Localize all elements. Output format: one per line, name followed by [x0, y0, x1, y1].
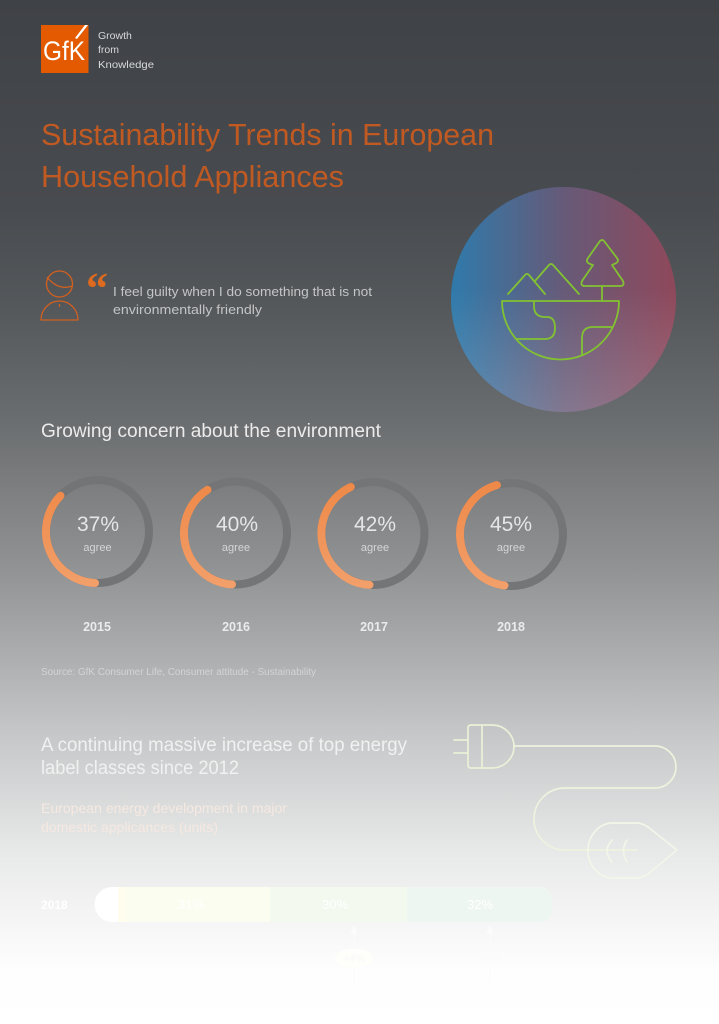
icon: plug with leaf — [454, 725, 677, 878]
donut chart: 2017: agree — [361, 542, 389, 554]
heading: energy label classes: label classes since 2012 — [41, 758, 239, 779]
row label: 2018 — [41, 898, 68, 912]
quote text: environmentally friendly — [113, 302, 263, 317]
donut chart: 2015: 2015 — [83, 620, 111, 634]
heading: growing concern: Growing concern about the environment — [41, 421, 382, 442]
donut chart: 2016: 2016 — [222, 620, 250, 634]
donut chart: 2015: 37% — [77, 513, 119, 536]
GfK logo: from — [98, 44, 119, 56]
heading: energy label classes — [41, 735, 407, 779]
icon: landscape in gradient circle — [451, 187, 676, 412]
title — [41, 117, 494, 194]
donut chart: 2017: 2017 — [360, 620, 388, 634]
bar values — [178, 897, 493, 912]
donut chart: 2018: 45% — [490, 513, 532, 536]
donut chart: 2017 — [321, 482, 424, 634]
arrow and change badge: first class: +4% — [343, 953, 365, 965]
donut chart: 2017: 42% — [354, 513, 396, 536]
donut chart: 2018: agree — [497, 542, 525, 554]
bar segments — [94, 887, 552, 922]
donut chart: 2016: agree — [222, 542, 250, 554]
GfK logo — [41, 25, 154, 73]
donut chart: 2015 — [46, 480, 149, 634]
donut chart: 2018 — [460, 483, 563, 634]
arrow and change badge: first class — [335, 925, 373, 984]
subheading: energy development: domestic applicances (units) — [41, 820, 218, 835]
donut chart: 2016: 40% — [216, 513, 258, 536]
bar values: 30% — [322, 897, 348, 912]
donut chart: 2015: agree — [83, 542, 112, 554]
arrow and change badge: second class: +2% — [479, 953, 501, 965]
GfK logo: Growth — [98, 30, 132, 42]
title: Sustainability Trends in European — [41, 117, 494, 152]
arrow and change badge: second class — [479, 925, 501, 984]
icon: person — [41, 271, 78, 320]
quote text: I feel guilty when I do something that is not — [113, 284, 372, 299]
GfK logo: GfK — [43, 36, 85, 66]
bar values: 31% — [178, 897, 204, 912]
source note: Source: GfK Consumer Life, Consumer attitude - Sustainability — [41, 667, 316, 678]
stacked bar: 2018 energy classes — [41, 887, 552, 922]
quote text — [113, 284, 372, 317]
donut chart: 2016 — [184, 482, 287, 634]
donut chart: 2018: 2018 — [497, 620, 525, 634]
bar values: 32% — [467, 897, 493, 912]
subheading: energy development: European energy development in major — [41, 801, 288, 816]
GfK logo: Knowledge — [98, 59, 154, 71]
title: Household Appliances — [41, 159, 344, 194]
icon: quotation mark: “ — [86, 264, 108, 313]
subheading: energy development — [41, 801, 288, 835]
heading: energy label classes: A continuing massive increase of top energy — [41, 735, 407, 756]
